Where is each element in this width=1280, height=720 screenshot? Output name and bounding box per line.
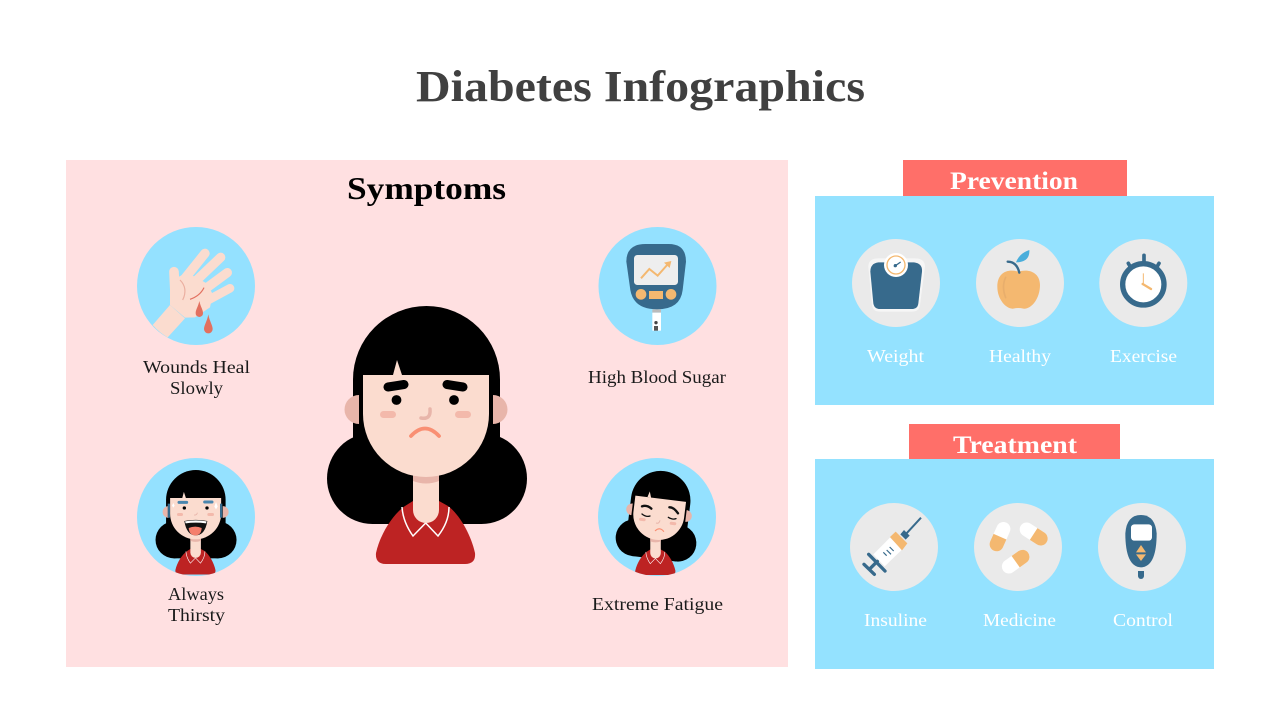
- label: healthy: Healthy: [989, 346, 1051, 366]
- icon: apple: [976, 239, 1064, 327]
- treatment heading tab: [909, 424, 1120, 459]
- label: always thirsty: [168, 584, 225, 625]
- label: wounds heal slowly: Slowly: [170, 378, 223, 398]
- panel: prevention: [815, 160, 1214, 405]
- icon: stopwatch: [1099, 239, 1187, 327]
- label: control: Control: [1113, 610, 1173, 630]
- label: medicine: Medicine: [983, 610, 1056, 630]
- prevention heading tab: Prevention: [950, 168, 1078, 195]
- icon: glucose meter: [598, 227, 716, 345]
- label: always thirsty: Thirsty: [168, 605, 225, 625]
- label: exercise: Exercise: [1110, 346, 1177, 366]
- central character: unhappy girl: [327, 306, 527, 564]
- icon: tired girl: [598, 458, 716, 576]
- label: wounds heal slowly: Wounds Heal: [143, 357, 250, 377]
- title: Diabetes Infographics: [416, 62, 865, 111]
- label: wounds heal slowly: [143, 357, 250, 398]
- treatment heading tab: Treatment: [953, 432, 1078, 459]
- label: extreme fatigue: Extreme Fatigue: [592, 594, 723, 614]
- label: always thirsty: Always: [168, 584, 224, 604]
- panel: treatment: [815, 424, 1214, 669]
- icon: medicine capsules: [974, 503, 1062, 591]
- icon: syringe: [850, 503, 938, 591]
- prevention heading tab: [903, 160, 1127, 196]
- symptoms heading: Symptoms: [347, 170, 506, 206]
- panel: symptoms: [66, 160, 788, 667]
- icon: wounded hand: [137, 227, 255, 345]
- label: insuline: Insuline: [864, 610, 927, 630]
- label: weight: Weight: [867, 346, 924, 366]
- icon: thirsty girl: [137, 458, 255, 576]
- label: high blood sugar: High Blood Sugar: [588, 367, 726, 387]
- icon: weight scale: [852, 239, 940, 327]
- icon: control device: [1098, 503, 1186, 591]
